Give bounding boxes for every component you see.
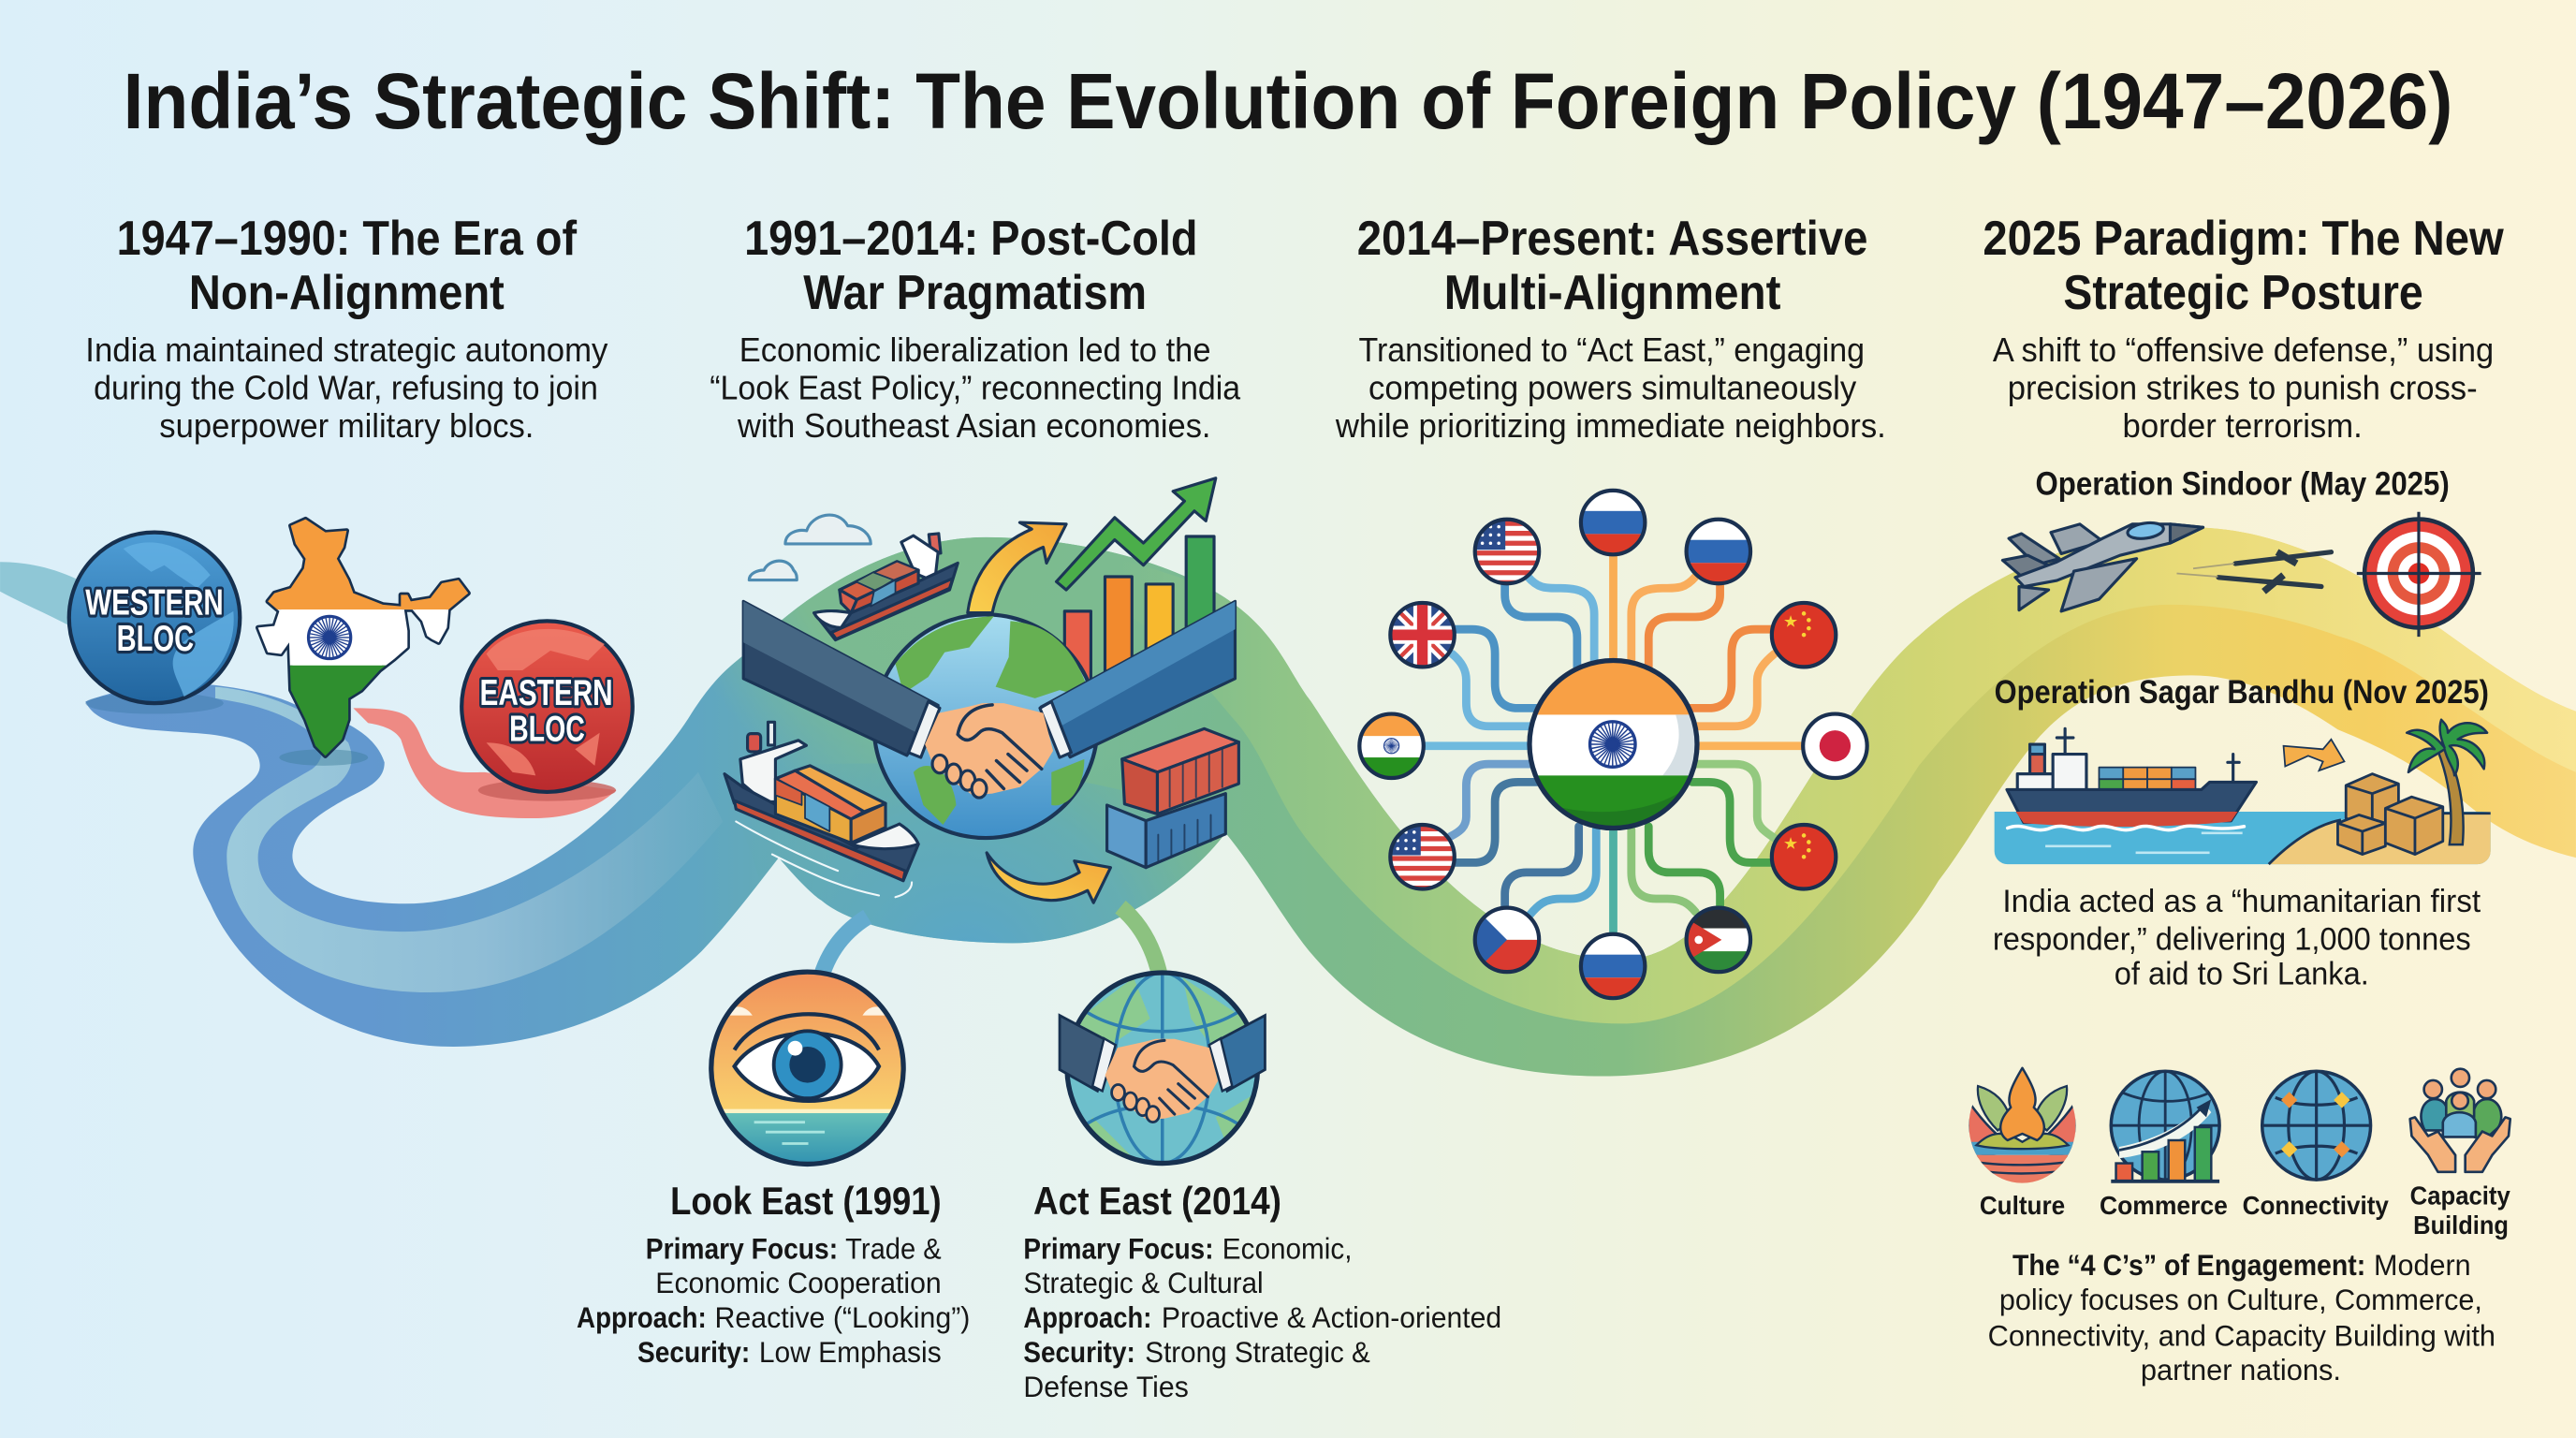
four C labels: Commerce bbox=[2100, 1191, 2228, 1220]
column 3 description: while prioritizing immediate neighbors. bbox=[1335, 406, 1886, 445]
look east heading: Look East (1991) bbox=[670, 1180, 942, 1223]
flag: Japan bbox=[1803, 714, 1867, 778]
column 4 description bbox=[1993, 330, 2494, 445]
icon: world globe bbox=[874, 614, 1097, 838]
column 4 description: border terrorism. bbox=[2123, 406, 2363, 445]
look east details: Trade & bbox=[845, 1231, 942, 1265]
label: eastern bloc: EASTERN bbox=[480, 673, 613, 713]
icon: Act East globe with handshake bbox=[1060, 969, 1265, 1170]
icon: handshake bbox=[925, 703, 1053, 798]
column 1 description: India maintained strategic autonomy bbox=[85, 330, 607, 369]
shadow: western globe bbox=[85, 693, 224, 714]
icon: fighter jet bbox=[2002, 521, 2203, 611]
column 1 description: superpower military blocs. bbox=[159, 406, 534, 445]
connector: to Act East bbox=[1120, 907, 1160, 976]
icon: left sleeve bbox=[743, 601, 940, 757]
four C description: Modern bbox=[2374, 1248, 2471, 1282]
act east details: Security: bbox=[1023, 1335, 1135, 1369]
label: western bloc: BLOC bbox=[117, 619, 194, 659]
icon: palm tree bbox=[2407, 720, 2487, 844]
operation sagar bandhu heading: Operation Sagar Bandhu (Nov 2025) bbox=[1995, 674, 2489, 711]
act east heading: Act East (2014) bbox=[1033, 1180, 1281, 1223]
four C labels: Culture bbox=[1980, 1191, 2065, 1220]
look east details: Economic Cooperation bbox=[655, 1266, 942, 1299]
icon: commerce bbox=[2111, 1071, 2219, 1181]
icon: culture bbox=[1969, 1067, 2076, 1183]
icon: Look East eye bbox=[707, 969, 912, 1171]
icon: sea and shore bbox=[1995, 812, 2491, 864]
four C description: partner nations. bbox=[2141, 1353, 2341, 1387]
column 3 heading bbox=[1357, 211, 1868, 319]
four C description: The “4 C’s” of Engagement: bbox=[2012, 1248, 2365, 1282]
flag: Russia top right bbox=[1684, 517, 1753, 586]
icon: missiles bbox=[2176, 552, 2331, 592]
four C labels: Connectivity bbox=[2243, 1191, 2389, 1220]
act east details bbox=[1023, 1231, 1501, 1403]
four C description bbox=[1988, 1248, 2496, 1387]
flag: Russia top bbox=[1578, 488, 1647, 557]
icon: central India flag globe bbox=[1527, 657, 1700, 831]
act east details: Defense Ties bbox=[1023, 1370, 1189, 1403]
label: eastern bloc: BLOC bbox=[509, 710, 585, 750]
operation sindoor heading: Operation Sindoor (May 2025) bbox=[2036, 465, 2450, 502]
operation sagar bandhu description: India acted as a “humanitarian first bbox=[2002, 884, 2481, 919]
flag: USA top left bbox=[1472, 517, 1542, 586]
column 1 description bbox=[85, 330, 607, 445]
flag: Russia bottom bbox=[1578, 932, 1647, 1001]
act east details: Proactive & Action-oriented bbox=[1162, 1300, 1501, 1334]
act east details: Primary Focus: bbox=[1023, 1231, 1213, 1265]
column 2 description: Economic liberalization led to the bbox=[739, 330, 1211, 369]
connector: to Look East bbox=[822, 917, 868, 976]
icon: india map in tricolour bbox=[255, 517, 471, 758]
flag: China lower right bbox=[1769, 822, 1838, 891]
icon: connectivity bbox=[2262, 1071, 2371, 1180]
column 3 description: competing powers simultaneously bbox=[1368, 368, 1856, 406]
icon: upper cargo ship bbox=[814, 534, 958, 640]
flag: UK bbox=[1388, 600, 1456, 669]
column 2 description: with Southeast Asian economies. bbox=[737, 406, 1211, 445]
column 1 heading: Non-Alignment bbox=[189, 265, 505, 319]
column 2 heading bbox=[744, 211, 1197, 319]
column 2 description: “Look East Policy,” reconnecting India bbox=[710, 368, 1240, 406]
column 4 heading: 2025 Paradigm: The New bbox=[1983, 211, 2504, 265]
look east details: Low Emphasis bbox=[759, 1335, 942, 1369]
icon: right sleeve bbox=[1040, 601, 1235, 757]
icon: capacity building bbox=[2410, 1069, 2510, 1172]
icon: target bbox=[2357, 512, 2481, 637]
look east details: Primary Focus: bbox=[646, 1231, 838, 1265]
column 4 description: precision strikes to punish cross- bbox=[2008, 368, 2478, 406]
icon: aid boxes bbox=[2337, 774, 2443, 855]
icon: relief cargo ship bbox=[2007, 728, 2256, 830]
look east details: Reactive (“Looking”) bbox=[714, 1300, 970, 1334]
act east details: Strategic & Cultural bbox=[1023, 1266, 1264, 1299]
title: India’s Strategic Shift: The Evolution of Foreign Policy (1947–2026) bbox=[124, 57, 2452, 145]
icon: shipping containers bbox=[1107, 728, 1238, 868]
column 3 description bbox=[1335, 330, 1886, 445]
act east details: Economic, bbox=[1222, 1231, 1352, 1265]
four C description: policy focuses on Culture, Commerce, bbox=[1999, 1283, 2482, 1316]
flag: India bbox=[1357, 712, 1426, 782]
icon: yellow arrow lower bbox=[987, 853, 1110, 902]
column 4 description: A shift to “offensive defense,” using bbox=[1993, 330, 2494, 369]
four C labels bbox=[1980, 1181, 2510, 1240]
look east details bbox=[577, 1231, 970, 1369]
column 1 heading bbox=[117, 211, 578, 319]
flowing timeline ribbon bbox=[0, 528, 2576, 1077]
icon: western bloc globe bbox=[69, 533, 240, 703]
four C labels: Building bbox=[2413, 1211, 2509, 1240]
chart: growth bars bbox=[1064, 536, 1214, 710]
flag: China upper right bbox=[1769, 600, 1838, 669]
flag: Czech Republic bbox=[1472, 905, 1542, 975]
flag: USA lower left bbox=[1388, 822, 1456, 891]
operation sagar bandhu description: responder,” delivering 1,000 tonnes bbox=[1993, 921, 2471, 957]
column 4 heading bbox=[1983, 211, 2504, 319]
four C labels: Capacity bbox=[2410, 1181, 2510, 1210]
network connectors bbox=[1426, 557, 1801, 932]
column 3 heading: 2014–Present: Assertive bbox=[1357, 211, 1868, 265]
act east details: Strong Strategic & bbox=[1145, 1335, 1370, 1369]
shadow: india map bbox=[279, 749, 368, 766]
column 2 description bbox=[710, 330, 1240, 445]
icon: lower cargo ship bbox=[724, 722, 918, 897]
label: western bloc bbox=[85, 582, 224, 659]
column 2 heading: 1991–2014: Post-Cold bbox=[744, 211, 1197, 265]
clouds bbox=[749, 515, 871, 580]
operation sagar bandhu description: of aid to Sri Lanka. bbox=[2115, 956, 2369, 991]
icon: delivery arrow bbox=[2284, 740, 2344, 770]
column 3 heading: Multi-Alignment bbox=[1444, 265, 1781, 319]
icon: yellow arrow up bbox=[968, 522, 1066, 613]
column 2 heading: War Pragmatism bbox=[803, 265, 1147, 319]
shadow: eastern globe bbox=[478, 780, 616, 801]
operation sagar bandhu description bbox=[1993, 884, 2481, 991]
act east details: Approach: bbox=[1023, 1300, 1151, 1334]
look east details: Security: bbox=[637, 1335, 750, 1369]
label: eastern bloc bbox=[480, 673, 613, 750]
column 1 description: during the Cold War, refusing to join bbox=[94, 368, 598, 406]
Eastern bloc stream bbox=[353, 708, 616, 818]
four C description: Connectivity, and Capacity Building with bbox=[1988, 1318, 2496, 1352]
column 1 heading: 1947–1990: The Era of bbox=[117, 211, 578, 265]
flag: Jordan bbox=[1684, 905, 1753, 975]
look east details: Approach: bbox=[577, 1300, 707, 1334]
icon: eastern bloc globe bbox=[461, 621, 633, 792]
column 4 heading: Strategic Posture bbox=[2063, 265, 2423, 319]
icon: green growth arrow bbox=[1057, 478, 1216, 590]
column 3 description: Transitioned to “Act East,” engaging bbox=[1358, 330, 1865, 369]
label: western bloc: WESTERN bbox=[85, 582, 224, 623]
